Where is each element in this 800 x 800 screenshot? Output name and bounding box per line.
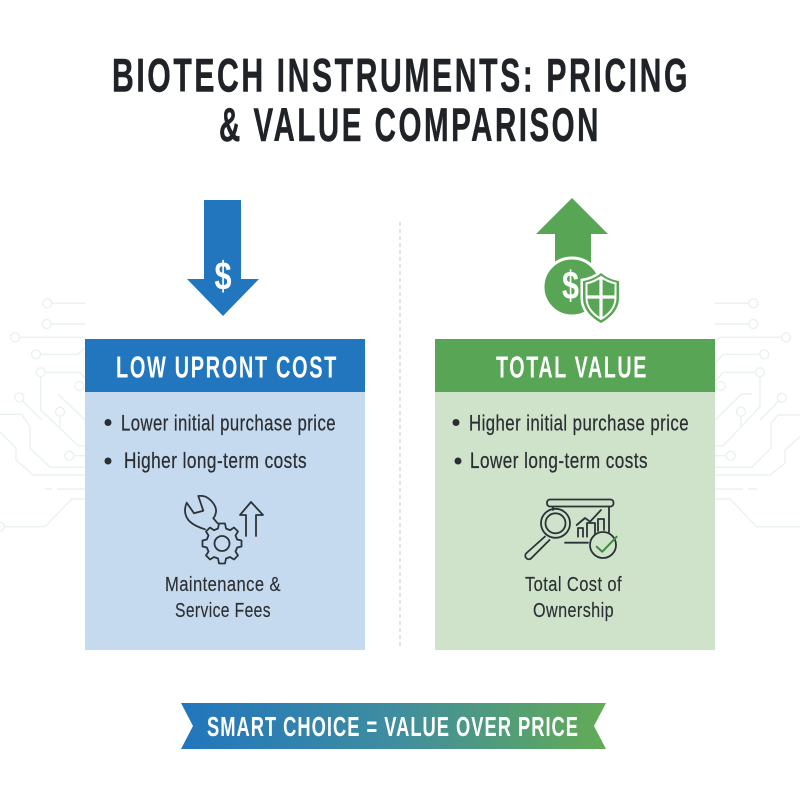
caption: maintenance and service fees: Maintenance &: [165, 573, 281, 596]
icon: wrench, gear and up arrow: [185, 496, 263, 564]
caption: total cost of ownership: [525, 573, 622, 622]
panel: total value: [435, 339, 715, 650]
panel heading: LOW UPRONT COST: [116, 350, 338, 384]
bullet: lower long-term costs: Lower long-term costs: [470, 448, 648, 473]
panel body: [435, 339, 715, 650]
icon: blue down arrow with dollar: [187, 200, 259, 316]
panel: low upfront cost: [85, 339, 365, 650]
panel header: [435, 339, 715, 392]
bullet: higher long-term costs: Higher long-term costs: [124, 448, 307, 473]
panel header: [85, 339, 365, 392]
panel heading: TOTAL VALUE: [496, 350, 648, 384]
panel body: [85, 339, 365, 650]
caption: total cost of ownership: Total Cost of: [525, 573, 622, 596]
icon: blue down arrow with dollar: $: [214, 254, 232, 298]
dashed divider: [399, 222, 401, 648]
icon: magnifier over chart with check mark: [525, 500, 617, 559]
title: [112, 48, 690, 151]
caption: total cost of ownership: Ownership: [533, 599, 614, 622]
bullet: higher initial purchase price: Higher initial purchase price: [469, 410, 689, 436]
background circuit pattern: right: [715, 299, 800, 527]
banner: smart choice: [181, 703, 606, 749]
banner: smart choice: SMART CHOICE = VALUE OVER PRICE: [207, 711, 579, 742]
caption: maintenance and service fees: Service Fees: [175, 599, 271, 622]
caption: maintenance and service fees: [165, 573, 281, 622]
icon: green up arrow with coin and shield: $: [562, 264, 579, 308]
bullet: lower initial purchase price: Lower initial purchase price: [121, 410, 336, 436]
icon: green up arrow with coin and shield: [536, 198, 619, 323]
background circuit pattern: left: [0, 299, 85, 531]
